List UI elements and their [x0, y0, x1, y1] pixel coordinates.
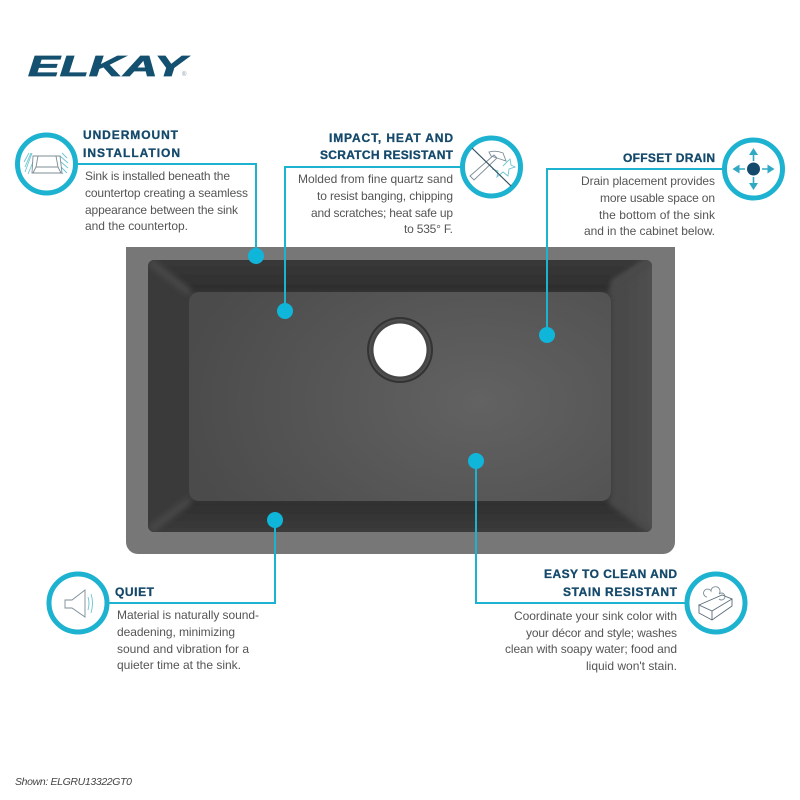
body text: appearance between the sink [85, 203, 239, 217]
body text: Drain placement provides [581, 174, 715, 188]
body text: and scratches; heat safe up [311, 206, 453, 220]
sink rim [126, 247, 675, 554]
callout: easy to clean and stain resistant [468, 453, 745, 673]
body text: liquid won't stain. [586, 659, 677, 673]
body text: quieter time at the sink. [117, 658, 241, 672]
callout: offset drain [539, 140, 782, 343]
body text: and the countertop. [85, 219, 188, 233]
callout: quiet [49, 512, 283, 672]
heading: IMPACT, HEAT AND [329, 131, 453, 145]
callout: impact, heat and scratch resistant [277, 131, 520, 319]
body text: Coordinate your sink color with [514, 609, 677, 623]
heading: UNDERMOUNT [83, 128, 179, 142]
leader line [76, 164, 256, 256]
body text: clean with soapy water; food and [505, 642, 677, 656]
body text: Material is naturally sound- [117, 608, 259, 622]
heading: OFFSET DRAIN [623, 151, 715, 165]
heading: SCRATCH RESISTANT [320, 148, 454, 162]
body text: Molded from fine quartz sand [298, 172, 453, 186]
icon: undermount sink [18, 135, 76, 193]
body text: countertop creating a seamless [85, 186, 248, 200]
body text: more usable space on [600, 191, 715, 205]
marker dot [468, 453, 484, 469]
leader line [285, 167, 464, 311]
heading [83, 128, 180, 160]
body text [581, 174, 716, 238]
marker dot [267, 512, 283, 528]
body text [117, 608, 259, 672]
heading [544, 567, 678, 599]
body text: to 535° F. [404, 222, 453, 236]
body text [505, 609, 677, 673]
heading: STAIN RESISTANT [563, 585, 678, 599]
body text: Sink is installed beneath the [85, 169, 230, 183]
body text: and in the cabinet below. [584, 224, 715, 238]
marker dot [539, 327, 555, 343]
logo: Elkay: ELKAY [28, 51, 190, 83]
leader line [476, 461, 686, 603]
leader line [107, 520, 275, 603]
basin walls [140, 250, 660, 540]
leader line [547, 169, 726, 335]
body text: your décor and style; washes [526, 626, 677, 640]
body text [85, 169, 248, 233]
icon: hammer with slash [462, 138, 520, 196]
body text: to resist banging, chipping [317, 189, 453, 203]
icon: speaker [49, 574, 107, 632]
body text: deadening, minimizing [117, 625, 235, 639]
caption: model number: Shown: ELGRU13322GT0 [15, 776, 132, 788]
heading: EASY TO CLEAN AND [544, 567, 677, 581]
body text [298, 172, 453, 236]
logo: Elkay: ® [182, 71, 187, 78]
heading [320, 131, 454, 162]
callout: undermount installation [18, 128, 264, 264]
icon: drain with arrows [724, 140, 782, 198]
body text: the bottom of the sink [599, 208, 716, 222]
logo: Elkay [28, 51, 190, 83]
icon: soap bar with bubbles [687, 574, 745, 632]
marker dot [248, 248, 264, 264]
marker dot [277, 303, 293, 319]
sink illustration [126, 247, 675, 554]
drain [367, 317, 433, 383]
basin floor [189, 292, 611, 501]
heading: QUIET [115, 585, 155, 599]
heading: INSTALLATION [83, 146, 180, 160]
body text: sound and vibration for a [117, 642, 249, 656]
